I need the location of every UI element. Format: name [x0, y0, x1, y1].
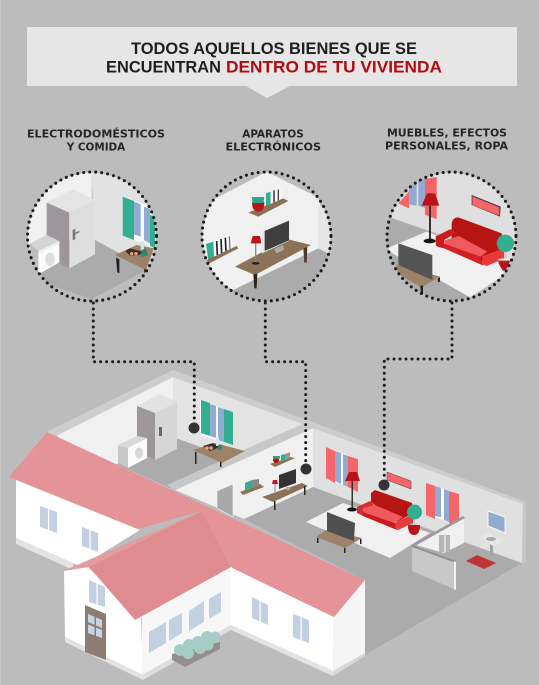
circle: electronics detail — [200, 170, 332, 302]
kitchen table — [193, 437, 245, 467]
label: electrodomesticos — [27, 128, 165, 154]
kitchen furnishings — [118, 394, 245, 468]
circle: kitchen detail — [26, 170, 158, 302]
rug — [466, 555, 496, 569]
connector 1 — [93, 303, 200, 434]
label: aparatos electronicos: APARATOS — [242, 128, 304, 140]
table lamp — [272, 480, 278, 492]
label: muebles: PERSONALES, ROPA — [385, 140, 508, 152]
bathroom — [411, 511, 505, 590]
front right wall — [135, 567, 231, 680]
shelf with plant — [270, 452, 295, 467]
window with teal curtains — [200, 400, 233, 445]
title text: DENTRO DE TU VIVIENDA — [226, 58, 442, 76]
monitor — [279, 469, 296, 490]
desk — [262, 483, 308, 510]
front gable roof — [63, 511, 231, 620]
left wing wall — [16, 480, 140, 570]
title text: TODOS AQUELLOS BIENES QUE SE — [131, 39, 417, 58]
label: aparatos electronicos — [226, 128, 321, 154]
right wing walls — [231, 567, 365, 676]
title banner — [27, 27, 517, 98]
door in partition — [217, 484, 233, 517]
painting — [387, 472, 411, 489]
television on stand — [316, 512, 362, 553]
house exterior — [9, 432, 365, 680]
front gable wall — [64, 567, 143, 680]
red sofa — [357, 490, 415, 530]
title text — [106, 39, 442, 76]
floor lamp — [345, 472, 360, 512]
electronics room furnishings — [240, 452, 308, 510]
circle: furniture detail — [386, 170, 518, 302]
fridge — [137, 394, 177, 460]
bathroom partition — [411, 516, 465, 553]
house interior: walls and floors — [46, 370, 526, 655]
second window — [426, 483, 459, 527]
label: electrodomesticos: ELECTRODOMÉSTICOS — [27, 128, 165, 140]
connector 3 — [378, 303, 452, 490]
sink — [479, 533, 503, 556]
main roof — [9, 432, 365, 617]
living room furnishings — [306, 447, 459, 558]
bathroom front wall — [412, 545, 456, 590]
carpet — [306, 503, 430, 558]
label: electrodomesticos: Y COMIDA — [66, 142, 125, 154]
title text: ENCUENTRAN — [106, 58, 221, 76]
washing machine — [118, 436, 147, 468]
living window with red curtains — [326, 447, 358, 492]
planter — [172, 631, 220, 667]
label: muebles — [385, 128, 508, 152]
label: muebles: MUEBLES, EFECTOS — [387, 128, 507, 140]
potted plant — [407, 504, 422, 535]
connector 2 — [265, 303, 312, 474]
shelf with books — [240, 479, 264, 495]
label: aparatos electronicos: ELECTRÓNICOS — [226, 140, 321, 154]
mirror — [488, 511, 505, 533]
front door — [85, 605, 106, 660]
